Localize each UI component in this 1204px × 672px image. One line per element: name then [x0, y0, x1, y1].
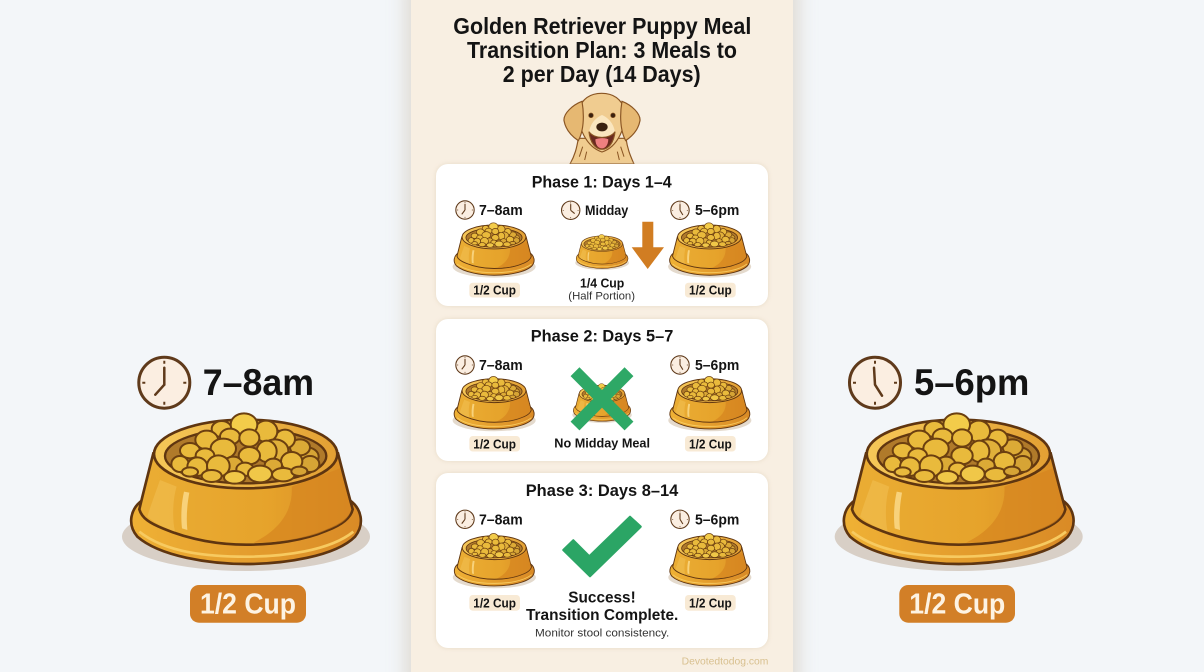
clock 7-8am: [456, 356, 474, 374]
time label 5-6pm: 5–6pm: [695, 512, 739, 528]
panel shadow: [405, 0, 799, 672]
bowl evening: [668, 377, 751, 431]
portion pill evening: 1/2 Cup: [689, 437, 732, 451]
time label 7-8am large: 7–8am: [203, 362, 314, 403]
clock 5-6pm: [671, 510, 689, 528]
phase 3 heading: Phase 3: Days 8–14: [526, 482, 679, 500]
success message: Success!: [568, 590, 636, 607]
portion pill large: 1/2 Cup: [909, 588, 1005, 620]
clock 5-6pm: [671, 356, 689, 374]
midday portion text: (Half Portion): [568, 290, 635, 302]
portion pill large: 1/2 Cup: [200, 588, 296, 620]
title: Transition Plan: 3 Meals to: [467, 37, 737, 63]
title: 2 per Day (14 Days): [503, 61, 701, 87]
arrow: reduce portion: [632, 222, 664, 269]
time label 7-8am: 7–8am: [479, 358, 523, 374]
success message: Transition Complete.: [526, 607, 678, 624]
portion pill morning: 1/2 Cup: [473, 283, 516, 297]
panel: right evening meal: [835, 357, 1083, 623]
panel: phase 2: [436, 319, 768, 461]
portion pill evening: 1/2 Cup: [689, 596, 732, 610]
panel: phase 3: [436, 473, 768, 648]
panel: central plan: [411, 0, 793, 672]
midday portion text: [568, 276, 635, 302]
clock 5-6pm large: [850, 357, 900, 408]
time label 5-6pm large: 5–6pm: [914, 362, 1029, 403]
phase 2 heading: Phase 2: Days 5–7: [531, 328, 673, 346]
clock 7-8am: [456, 510, 474, 528]
clock 5-6pm: [671, 201, 689, 219]
clock midday: [562, 201, 580, 219]
bowl morning: [453, 223, 536, 278]
bowl morning: [453, 534, 536, 588]
time label 7-8am: 7–8am: [479, 512, 523, 528]
success message: [526, 590, 678, 640]
clock 7-8am large: [139, 357, 190, 408]
success message: Monitor stool consistency.: [535, 628, 669, 640]
large bowl morning: [122, 413, 370, 571]
time label midday: Midday: [585, 203, 629, 218]
bowl morning: [453, 377, 536, 431]
bowl midday crossed out: [572, 384, 632, 423]
phase 1 heading: Phase 1: Days 1–4: [532, 174, 672, 192]
icon: green cross: [575, 372, 629, 426]
time label 5-6pm: 5–6pm: [695, 203, 739, 219]
portion pill evening: 1/2 Cup: [689, 283, 732, 297]
title: Golden Retriever Puppy Meal: [453, 13, 751, 39]
bowl midday half portion: [575, 234, 629, 270]
time label 5-6pm: 5–6pm: [695, 358, 739, 374]
panel: left morning meal: [122, 357, 370, 623]
clock 7-8am: [456, 201, 474, 219]
icon: green check mark: [564, 517, 640, 576]
panel: phase 1: [436, 164, 768, 306]
portion pill morning: 1/2 Cup: [473, 596, 516, 610]
brand credit: Devotedtodog.com: [682, 656, 768, 667]
portion pill morning: 1/2 Cup: [473, 437, 516, 451]
bowl evening: [668, 223, 751, 278]
icon: golden retriever puppy: [564, 93, 640, 164]
large bowl evening: [835, 413, 1083, 571]
bowl evening: [668, 534, 751, 588]
midday portion text: 1/4 Cup: [580, 276, 625, 290]
no midday meal label: No Midday Meal: [554, 437, 650, 451]
time label 7-8am: 7–8am: [479, 203, 523, 219]
title: [453, 13, 751, 87]
